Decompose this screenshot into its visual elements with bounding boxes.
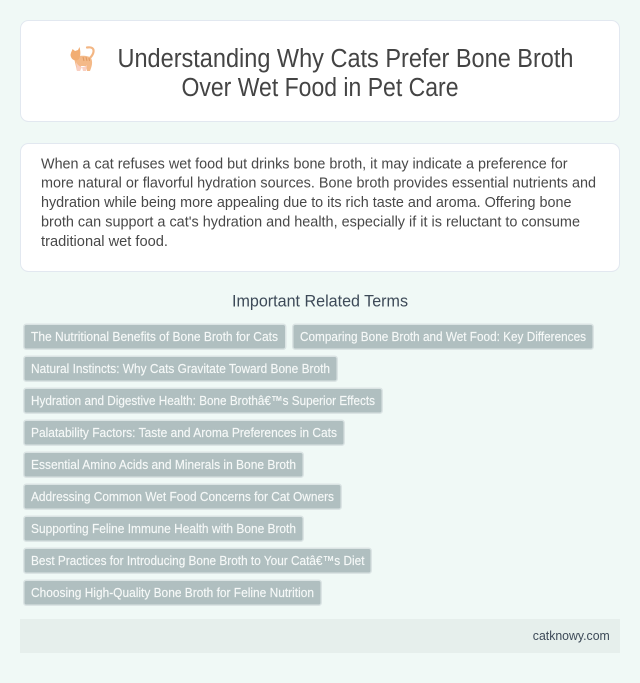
tag: Supporting Feline Immune Health with Bone Broth: [31, 521, 296, 536]
summary text: traditional wet food.: [41, 233, 168, 250]
tag: [24, 452, 303, 477]
panel: summary card: [20, 144, 620, 272]
tag: [24, 388, 382, 413]
panel: title card: [20, 20, 620, 122]
title: Over Wet Food in Pet Care: [182, 74, 458, 102]
tag: Best Practices for Introducing Bone Broth to Your Catâ€™s Diet: [31, 553, 365, 568]
footer source link: catknowy.com: [533, 628, 610, 643]
tag: Hydration and Digestive Health: Bone Brothâ€™s Superior Effects: [31, 393, 375, 408]
tag list: [24, 324, 593, 605]
summary text: more natural or flavorful hydration sources. Bone broth provides essential nutrients and: [41, 175, 596, 192]
tag: [24, 580, 321, 605]
tag: [24, 420, 344, 445]
summary text: broth can support a cat's hydration and health, especially if it is reluctant to consume: [41, 214, 580, 230]
title: [118, 45, 574, 102]
summary text: When a cat refuses wet food but drinks bone broth, it may indicate a preference for: [41, 155, 568, 172]
tag: [24, 484, 341, 509]
tag: Natural Instincts: Why Cats Gravitate Toward Bone Broth: [31, 361, 330, 376]
tag: [293, 324, 593, 349]
footer: [20, 619, 620, 653]
title: Understanding Why Cats Prefer Bone Broth: [118, 45, 574, 73]
tag: [24, 516, 303, 541]
tag: [24, 324, 286, 349]
tag: [24, 548, 371, 573]
tag: Choosing High-Quality Bone Broth for Feline Nutrition: [31, 585, 314, 600]
tag: Essential Amino Acids and Minerals in Bone Broth: [31, 457, 296, 472]
heading: important related terms: Important Related Terms: [232, 292, 408, 311]
tag: The Nutritional Benefits of Bone Broth for Cats: [31, 329, 278, 344]
summary text: hydration while being more appealing due to its rich taste and aroma. Offering bone: [41, 194, 572, 211]
tag: [24, 356, 337, 381]
summary text: [41, 155, 596, 250]
icon: orange cat: [70, 47, 94, 71]
tag: Palatability Factors: Taste and Aroma Preferences in Cats: [31, 425, 337, 440]
tag: Addressing Common Wet Food Concerns for Cat Owners: [31, 489, 334, 504]
tag: Comparing Bone Broth and Wet Food: Key Differences: [300, 329, 586, 344]
